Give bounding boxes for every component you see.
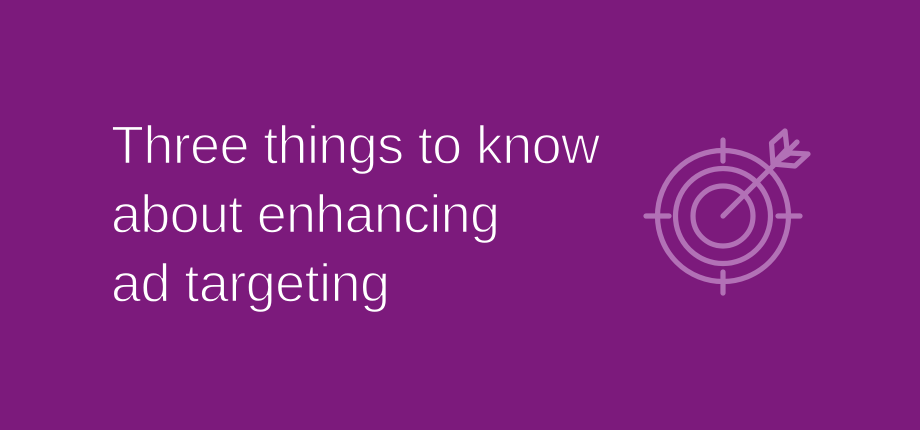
title: Three things to know <box>111 116 601 176</box>
title: about enhancing <box>111 184 500 244</box>
icon: target with arrow <box>646 131 808 293</box>
title: ad targeting <box>111 254 390 314</box>
title <box>111 116 601 314</box>
